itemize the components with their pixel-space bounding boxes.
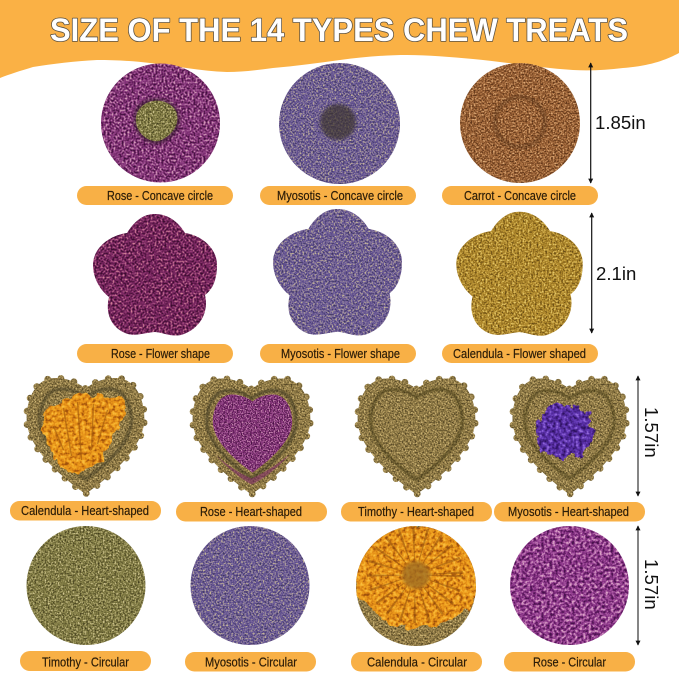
label: calendula heart-shaped: Calendula - Heart-shaped — [21, 503, 149, 518]
dimension arrow: 1.85in — [591, 63, 646, 183]
label: calendula circular: Calendula - Circular — [367, 654, 468, 670]
treat: rose flower shape — [93, 214, 217, 336]
label: rose concave circle: Rose - Concave circle — [107, 188, 213, 203]
petal streaks — [54, 402, 108, 460]
label: rose flower shape — [77, 344, 233, 363]
label: calendula flower shaped: Calendula - Flower shaped — [453, 346, 586, 361]
label: rose heart-shaped: Rose - Heart-shaped — [200, 504, 302, 519]
title: SIZE OF THE 14 TYPES CHEW TREATS — [50, 12, 628, 48]
label: myosotis circular: Myosotis - Circular — [205, 654, 298, 670]
treat: myosotis flower shape — [273, 209, 402, 335]
dimension arrow: 1.57in circles: 1.57in — [641, 559, 662, 610]
label: rose circular — [504, 652, 635, 672]
dimension arrow: 1.57in hearts — [638, 376, 662, 496]
label: myosotis flower shape — [260, 344, 416, 363]
label: myosotis flower shape: Myosotis - Flower shape — [281, 346, 400, 361]
label: myosotis concave circle: Myosotis - Concave circle — [277, 188, 403, 203]
dimension arrow: 1.85in: 1.85in — [595, 112, 646, 133]
dimension arrow: 1.57in hearts: 1.57in — [641, 407, 662, 458]
label: timothy heart-shaped — [341, 502, 492, 522]
treat: myosotis heart-shaped — [512, 379, 627, 494]
label: carrot concave circle — [442, 186, 598, 205]
label: rose flower shape: Rose - Flower shape — [111, 346, 210, 361]
label: timothy circular: Timothy - Circular — [42, 654, 130, 670]
label: myosotis heart-shaped — [494, 502, 645, 522]
label: calendula circular — [351, 652, 482, 672]
dimension arrow: 2.1in: 2.1in — [596, 263, 636, 284]
label: rose concave circle — [77, 186, 233, 205]
label: rose circular: Rose - Circular — [533, 654, 607, 670]
label: calendula heart-shaped — [10, 501, 161, 520]
dimension arrow: 2.1in — [592, 213, 636, 333]
label: myosotis concave circle — [260, 186, 416, 205]
label: rose heart-shaped — [176, 502, 327, 522]
treat: rose circular — [510, 526, 629, 645]
dimension arrow: 1.57in circles — [638, 526, 662, 645]
treat: calendula heart-shaped — [27, 378, 144, 494]
label: timothy heart-shaped: Timothy - Heart-shaped — [358, 504, 474, 519]
label: myosotis heart-shaped: Myosotis - Heart-shaped — [508, 504, 629, 519]
treat: rose heart-shaped — [193, 379, 310, 494]
label: carrot concave circle: Carrot - Concave circle — [464, 188, 576, 203]
label: calendula flower shaped — [442, 344, 598, 363]
treat: calendula circular — [355, 524, 477, 646]
label: timothy circular — [20, 651, 151, 671]
treat: timothy heart-shaped — [358, 379, 475, 494]
header banner — [0, 0, 679, 78]
orange petals — [355, 524, 477, 628]
treat: calendula flower shaped — [456, 212, 583, 336]
label: myosotis circular — [185, 652, 316, 672]
treat: myosotis concave circle — [279, 63, 400, 184]
treat: rose concave circle — [101, 64, 220, 182]
treat: timothy circular — [26, 526, 146, 645]
treat: myosotis circular — [190, 526, 310, 645]
treat: carrot concave circle — [460, 63, 580, 183]
